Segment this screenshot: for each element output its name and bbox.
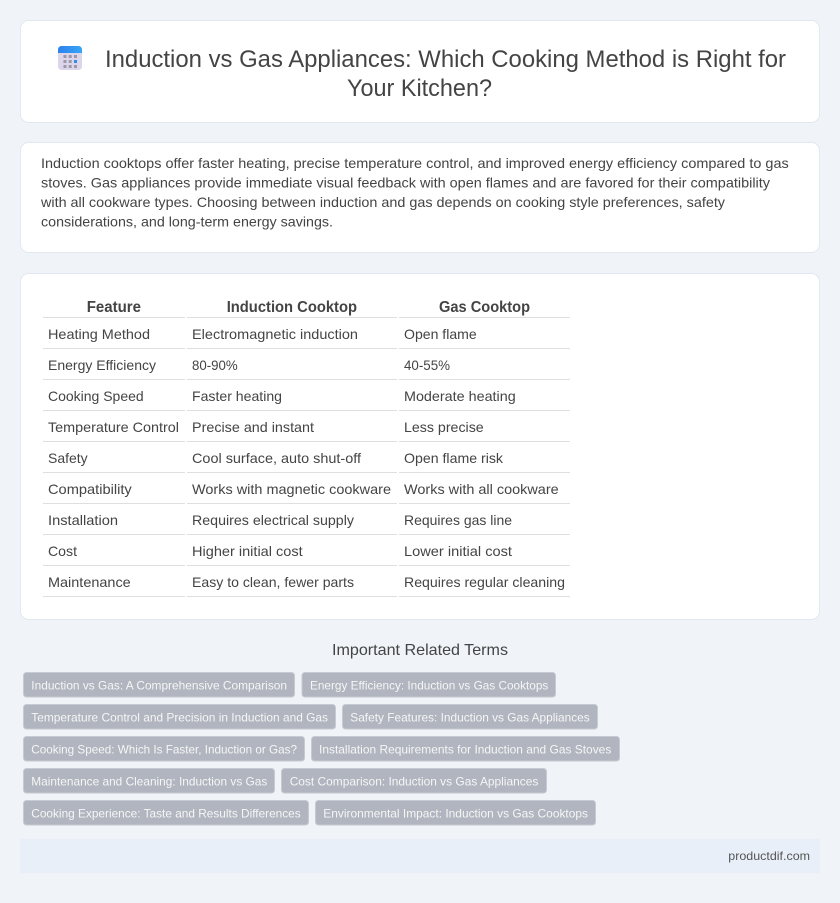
table row: temperature control: Less precise bbox=[404, 419, 484, 435]
text block: introduction paragraph: with all cookware types. Choosing between induction and gas depends on cooking style preferences, safety bbox=[40, 194, 725, 210]
table row: compatibility bbox=[43, 481, 570, 504]
tag bbox=[342, 704, 598, 729]
tag: Maintenance and Cleaning: Induction vs Gas bbox=[31, 774, 267, 788]
table row: safety: Cool surface, auto shut-off bbox=[192, 450, 361, 466]
table row: cost: Lower initial cost bbox=[404, 543, 512, 559]
title: Induction vs Gas Appliances: Which Cooking Method is Right for bbox=[105, 46, 786, 73]
table row: compatibility: Works with all cookware bbox=[404, 481, 559, 497]
table row: temperature control: Temperature Control bbox=[48, 419, 179, 435]
table row: heating method: Open flame bbox=[404, 326, 477, 342]
table row: safety: Open flame risk bbox=[404, 450, 504, 466]
table row: maintenance: Maintenance bbox=[48, 574, 131, 590]
tag: Cost Comparison: Induction vs Gas Appliances bbox=[290, 774, 538, 788]
table row: heating method bbox=[43, 326, 570, 349]
table row: cooking speed: Faster heating bbox=[192, 388, 282, 404]
table row: energy efficiency: 40-55% bbox=[404, 357, 450, 373]
table header row: Induction Cooktop bbox=[227, 299, 357, 316]
footer source text: productdif.com bbox=[728, 849, 810, 863]
title: Your Kitchen? bbox=[347, 75, 492, 102]
tag bbox=[282, 768, 546, 793]
text block: introduction paragraph: Induction cooktops offer faster heating, precise temperature control, and improved energy efficiency compared to gas bbox=[41, 155, 789, 171]
table row: cooking speed bbox=[43, 388, 570, 411]
heading: important related terms: Important Related Terms bbox=[332, 642, 508, 659]
table row: maintenance: Requires regular cleaning bbox=[404, 574, 565, 590]
tag bbox=[24, 736, 304, 761]
table row: maintenance bbox=[43, 574, 570, 597]
text block: introduction paragraph: considerations, and long-term energy savings. bbox=[41, 214, 333, 230]
tag: Environmental Impact: Induction vs Gas Cooktops bbox=[323, 806, 588, 820]
table row: energy efficiency: Energy Efficiency bbox=[48, 357, 156, 373]
table row: cost bbox=[43, 543, 570, 566]
table row: safety bbox=[43, 450, 570, 473]
footer bbox=[20, 839, 820, 873]
table header row: Gas Cooktop bbox=[439, 299, 530, 316]
tag bbox=[24, 704, 336, 729]
table row: cooking speed: Cooking Speed bbox=[48, 388, 144, 404]
table row: temperature control bbox=[43, 419, 570, 442]
tag: Temperature Control and Precision in Induction and Gas bbox=[31, 710, 328, 724]
tag: Cooking Speed: Which Is Faster, Induction or Gas? bbox=[31, 742, 297, 756]
panel: comparison table bbox=[20, 274, 820, 620]
icon: calendar grid bbox=[58, 46, 82, 70]
tag bbox=[316, 800, 596, 825]
tag: Energy Efficiency: Induction vs Gas Cooktops bbox=[310, 678, 548, 692]
related terms tags bbox=[24, 672, 620, 825]
tag bbox=[312, 736, 620, 761]
tag: Safety Features: Induction vs Gas Appliances bbox=[350, 710, 590, 724]
table header row bbox=[43, 299, 570, 318]
table row: energy efficiency bbox=[43, 357, 570, 380]
tag bbox=[24, 800, 308, 825]
tag bbox=[24, 768, 274, 793]
table row: compatibility: Works with magnetic cookware bbox=[192, 481, 391, 497]
tag: Cooking Experience: Taste and Results Differences bbox=[31, 806, 301, 820]
table row: compatibility: Compatibility bbox=[48, 481, 132, 497]
tag bbox=[24, 672, 294, 697]
table row: installation bbox=[43, 512, 570, 535]
table row: energy efficiency: 80-90% bbox=[192, 357, 238, 373]
text block: introduction paragraph: stoves. Gas appliances provide immediate visual feedback with open flames and are favored for their compatibility bbox=[41, 174, 770, 190]
tag: Installation Requirements for Induction and Gas Stoves bbox=[319, 742, 611, 756]
tag: Induction vs Gas: A Comprehensive Comparison bbox=[31, 678, 287, 692]
tag bbox=[302, 672, 556, 697]
table row: installation: Requires electrical supply bbox=[192, 512, 354, 528]
panel: introduction bbox=[20, 142, 820, 252]
table row: cost: Higher initial cost bbox=[192, 543, 303, 559]
title bbox=[105, 46, 786, 102]
table row: temperature control: Precise and instant bbox=[192, 419, 314, 435]
table row: cooking speed: Moderate heating bbox=[404, 388, 516, 404]
panel: title header bbox=[20, 20, 820, 122]
table row: maintenance: Easy to clean, fewer parts bbox=[192, 574, 354, 590]
text block: introduction paragraph bbox=[40, 155, 789, 230]
table row: installation: Requires gas line bbox=[404, 512, 512, 528]
table row: installation: Installation bbox=[48, 512, 118, 528]
table row: cost: Cost bbox=[48, 543, 77, 559]
table row: heating method: Electromagnetic induction bbox=[192, 326, 358, 342]
table row: safety: Safety bbox=[48, 450, 88, 466]
table row: heating method: Heating Method bbox=[48, 326, 150, 342]
table header row: Feature bbox=[87, 299, 141, 316]
